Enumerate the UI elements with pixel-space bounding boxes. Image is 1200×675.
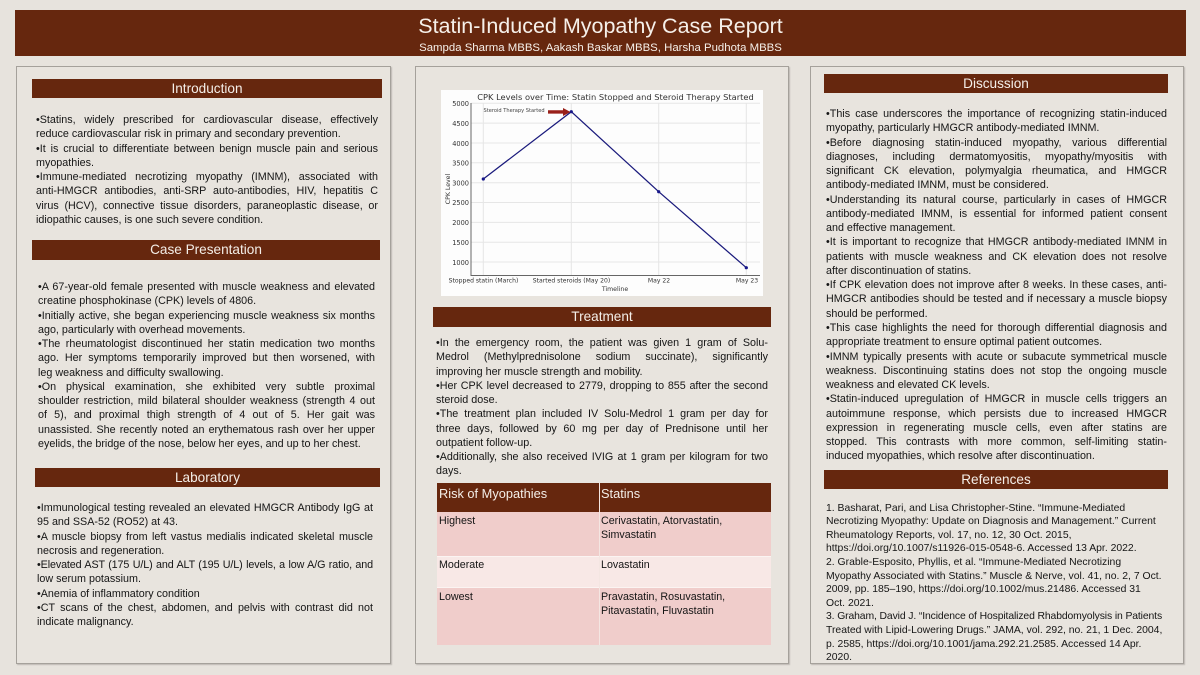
text: treatment: •The treatment plan included IV Solu-Medrol 1 gram per day for — [436, 408, 768, 420]
x axis labels: May 22 — [648, 278, 670, 284]
text: discussion: antibody-mediated IMNM, must be considered. — [826, 179, 1049, 191]
text: discussion: •This case highlights the need for thorough differential diagnosis and — [826, 322, 1167, 334]
text: introduction: idiopathic causes, is one such severe condition. — [36, 214, 263, 226]
text: discussion: patients with muscle weakness and CK elevation does not resolve — [826, 251, 1167, 263]
text: case presentation: •On physical examination, she exhibited very subtle proximal — [38, 381, 375, 393]
y axis labels: 4500 — [452, 120, 469, 128]
text: references: Necrotizing Myopathy: Update on Diagnosis and Management.” Current — [826, 516, 1156, 527]
text: discussion: appropriate treatment to ensure optimal patient outcomes. — [826, 336, 1102, 348]
title: Statin-Induced Myopathy Case Report — [418, 14, 783, 38]
heading: treatment: Treatment — [571, 309, 633, 324]
text: treatment: outpatient follow-up. — [436, 437, 532, 449]
table: risk of myopathies by statin: Pravastatin, Rosuvastatin, — [601, 591, 725, 603]
text: case presentation: shoulder restriction, mild bilateral shoulder weakness (strength 4 out — [38, 395, 375, 407]
heading: references: References — [961, 472, 1031, 487]
heading: discussion — [824, 74, 1168, 93]
text: case presentation: •A 67-year-old female presented with muscle weakness and elevated — [38, 281, 375, 293]
authors: Sampda Sharma MBBS, Aakash Baskar MBBS, Harsha Pudhota MBBS — [419, 42, 782, 54]
text: discussion: diagnoses, including dermatomyositis, myopathy/myositis with — [826, 151, 1167, 163]
text: treatment: •In the emergency room, the patient was given 1 gram of Solu- — [436, 337, 768, 349]
text: discussion: after discontinuation of statins. — [826, 265, 971, 277]
text: laboratory: 95 and SSA-52 (RO52) at 43. — [37, 516, 178, 528]
text: references: 2020. — [826, 652, 852, 663]
data line — [482, 110, 748, 269]
annotation: steroid therapy started — [484, 108, 570, 116]
text: discussion: stopped. This contrasts with more common, self-limiting statin- — [826, 436, 1167, 448]
title banner — [15, 10, 1186, 56]
text: references: 2009, pp. 185–190, https://doi.org/10.1002/mus.21486. Accessed 31 — [826, 584, 1141, 595]
text: case presentation: ago. Her symptoms temporarily improved but then worsened, with — [38, 352, 375, 364]
heading: treatment — [433, 307, 771, 327]
text: case presentation: •The rheumatologist discontinued her statin medication two months — [38, 338, 375, 350]
heading: case presentation — [32, 240, 380, 260]
y axis labels: 5000 — [452, 100, 469, 108]
text: introduction: •Immune-mediated necrotizing myopathy (IMNM), associated with — [36, 171, 378, 183]
text: discussion: •If CPK elevation does not improve after 8 weeks. In these cases, anti- — [826, 279, 1167, 291]
text: discussion: and effective management. — [826, 222, 955, 234]
text: treatment: improving her muscle strength and mobility. — [436, 366, 643, 378]
table: risk of myopathies by statin: Lovastatin — [601, 559, 650, 571]
text: discussion: significant CK elevation, polymyalgia rheumatica, and HMGCR — [826, 165, 1167, 177]
text: laboratory: low serum potassium. — [37, 573, 141, 585]
text: introduction: reduce cardiovascular risk in primary and secondary prevention. — [36, 128, 341, 140]
text: introduction — [36, 114, 378, 226]
text: laboratory: indicate malignancy. — [37, 616, 134, 628]
y axis labels: 2500 — [452, 199, 469, 207]
text: references — [826, 502, 1162, 663]
text: discussion: •Before diagnosing statin-induced myopathy, various differential — [826, 137, 1167, 149]
text: case presentation: creatine phosphokinase (CPK) levels of 4806. — [38, 295, 256, 307]
text: references: p. 2585, https://doi.org/10.1001/jama.292.21.2585. Accessed 14 Apr. — [826, 639, 1141, 650]
table: risk of myopathies by statin: Pitavastatin, Fluvastatin — [601, 605, 714, 617]
text: introduction: •It is crucial to differentiate between benign muscle pain and serious — [36, 143, 378, 155]
text: discussion: •This case underscores the importance of recognizing statin-induced — [826, 108, 1167, 120]
text: references: Myopathy Associated with Statins.” Muscle & Nerve, vol. 41, no. 2, 7 Oct. — [826, 571, 1162, 582]
heading: introduction: Introduction — [171, 81, 243, 96]
text: treatment: steroid dose. — [436, 394, 498, 406]
text: case presentation: of 5), and proximal thigh strength of 4 out of 5. Her gait was — [38, 409, 375, 421]
text: discussion: HMGCR antibodies should be tested and if necessary a muscle biopsy — [826, 293, 1167, 305]
text: case presentation — [38, 281, 375, 450]
text: treatment — [436, 337, 768, 477]
text: discussion: •Statin-induced upregulation of HMGCR in muscle cells triggers an — [826, 393, 1167, 405]
text: laboratory: •Immunological testing revealed an elevated HMGCR Antibody IgG at — [37, 502, 373, 514]
text: discussion: induced myopathies, which resolve after discontinuation. — [826, 450, 1095, 462]
table: risk of myopathies by statin — [437, 483, 771, 645]
text: introduction: anti-HMGCR antibodies, anti-SRP auto-antibodies, HIV, hepatitis C — [36, 185, 378, 197]
x axis labels: Started steroids (May 20) — [533, 278, 610, 284]
text: laboratory: necrosis and regeneration. — [37, 545, 164, 557]
y axis labels: 3500 — [452, 160, 469, 168]
table header: Risk of Myopathies — [439, 486, 547, 501]
text: discussion: •It is important to recognize that HMGCR antibody-mediated IMNM in — [826, 236, 1167, 248]
text: discussion: should be performed. — [826, 308, 928, 320]
text: case presentation: eyelids, the bridge of the nose, below her eyes, and up to her chest. — [38, 438, 361, 450]
row: moderate — [437, 556, 771, 588]
panel: left column — [16, 66, 391, 664]
x axis title: Timeline — [601, 286, 628, 293]
y axis labels: 1000 — [452, 259, 469, 267]
y axis title: CPK Level — [445, 174, 452, 204]
y axis labels: 1500 — [452, 239, 469, 247]
x axis labels: Stopped statin (March) — [449, 278, 518, 284]
table: risk of myopathies by statin: Simvastatin — [601, 529, 656, 541]
text: treatment: three days, followed by 60 mg per day of Prednisone until her — [436, 423, 768, 435]
text: references: https://doi.org/10.1007/s11926-015-0548-6. Accessed 13 Apr. 2022. — [826, 543, 1137, 554]
row text: moderate: Moderate — [439, 559, 484, 571]
text: discussion: weakness and elevated CK levels. — [826, 379, 990, 391]
text: discussion: •IMNM typically presents with acute or subacute symmetrical muscle — [826, 351, 1167, 363]
y axis labels: 3000 — [452, 180, 469, 188]
text: introduction: •Statins, widely prescribed for cardiovascular disease, effectively — [36, 114, 378, 126]
heading: case presentation: Case Presentation — [150, 242, 262, 257]
text: laboratory: •Elevated AST (175 U/L) and ALT (195 U/L) levels, a low A/G ratio, and — [37, 559, 373, 571]
text: discussion: weakness. Discontinuing statins does not stop the ongoing muscle — [826, 365, 1167, 377]
text: discussion: expression in regenerating muscle cells, even after statins are — [826, 422, 1167, 434]
text: introduction: virus (HCV), connective tissue disorders, paraneoplastic disease, or — [36, 200, 378, 212]
chart title: CPK Levels over Time: Statin Stopped and Steroid Therapy Started — [477, 92, 754, 102]
annotation: steroid therapy started: Steroid Therapy Started — [484, 108, 545, 114]
text: references: Treated with Lipid-Lowering Drugs.” JAMA, vol. 292, no. 21, 1 Dec. 2004, — [826, 625, 1162, 636]
table header — [437, 483, 771, 512]
panel: right column — [810, 66, 1184, 664]
text: introduction: myopathies. — [36, 157, 94, 169]
text: laboratory: •CT scans of the chest, abdomen, and pelvis with contrast did not — [37, 602, 373, 614]
text: discussion: •Understanding its natural course, particularly in cases of HMGCR — [826, 194, 1167, 206]
heading: introduction — [32, 79, 382, 98]
heading: laboratory — [35, 468, 380, 487]
text: case presentation: ago, particularly with overhead movements. — [38, 324, 245, 336]
text: treatment: days. — [436, 465, 462, 477]
row text: highest: Highest — [439, 515, 475, 527]
text: discussion: antibody-mediated IMNM, is essential for informed patient consent — [826, 208, 1167, 220]
text: treatment: •Her CPK level decreased to 2779, dropping to 855 after the second — [436, 380, 768, 392]
text: treatment: •Additionally, she also received IVIG at 1 gram per kilogram for two — [436, 451, 768, 463]
heading: laboratory: Laboratory — [175, 470, 240, 485]
text: references: 1. Basharat, Pari, and Lisa Christopher-Stine. “Immune-Mediated — [826, 502, 1125, 514]
text: laboratory: •A muscle biopsy from left vastus medialis indicated skeletal muscle — [37, 531, 373, 543]
text: laboratory — [37, 502, 373, 628]
heading: references — [824, 470, 1168, 489]
heading: discussion: Discussion — [963, 76, 1029, 91]
text: references: Rheumatology Reports, vol. 17, no. 12, 30 Oct. 2015, — [826, 530, 1071, 541]
text: discussion: autoimmune response, which persists due to increased HMGCR — [826, 408, 1167, 420]
y axis labels: 4000 — [452, 140, 469, 148]
text: references: Oct. 2021. — [826, 598, 874, 609]
chart: CPK levels over time — [441, 90, 763, 296]
text: references: 3. Graham, David J. “Incidence of Hospitalized Rhabdomyolysis in Patients — [826, 611, 1162, 622]
text: case presentation: leg weakness and difficulty swallowing. — [38, 367, 224, 379]
table: risk of myopathies by statin: Cerivastatin, Atorvastatin, — [601, 515, 722, 527]
text: case presentation: unassisted. She recently noted an erythematous rash over her upper — [38, 424, 375, 436]
y axis labels — [452, 100, 469, 267]
panel: middle column — [415, 66, 789, 664]
y axis labels: 2000 — [452, 219, 469, 227]
x axis labels: May 23 — [736, 278, 758, 284]
table header: Statins — [601, 486, 640, 501]
text: references: 2. Grable-Esposito, Phyllis, et al. “Immune-Mediated Necrotizing — [826, 557, 1121, 568]
text: discussion — [826, 108, 1167, 462]
x axis labels — [449, 278, 758, 284]
text: case presentation: •Initially active, she began experiencing muscle weakness six months — [38, 310, 375, 322]
row text: lowest: Lowest — [439, 591, 473, 603]
text: treatment: Medrol (Methylprednisolone sodium succinate), significantly — [436, 351, 768, 363]
text: laboratory: •Anemia of inflammatory condition — [37, 588, 200, 600]
text: discussion: myopathy, particularly HMGCR antibody-mediated IMNM. — [826, 122, 1099, 134]
